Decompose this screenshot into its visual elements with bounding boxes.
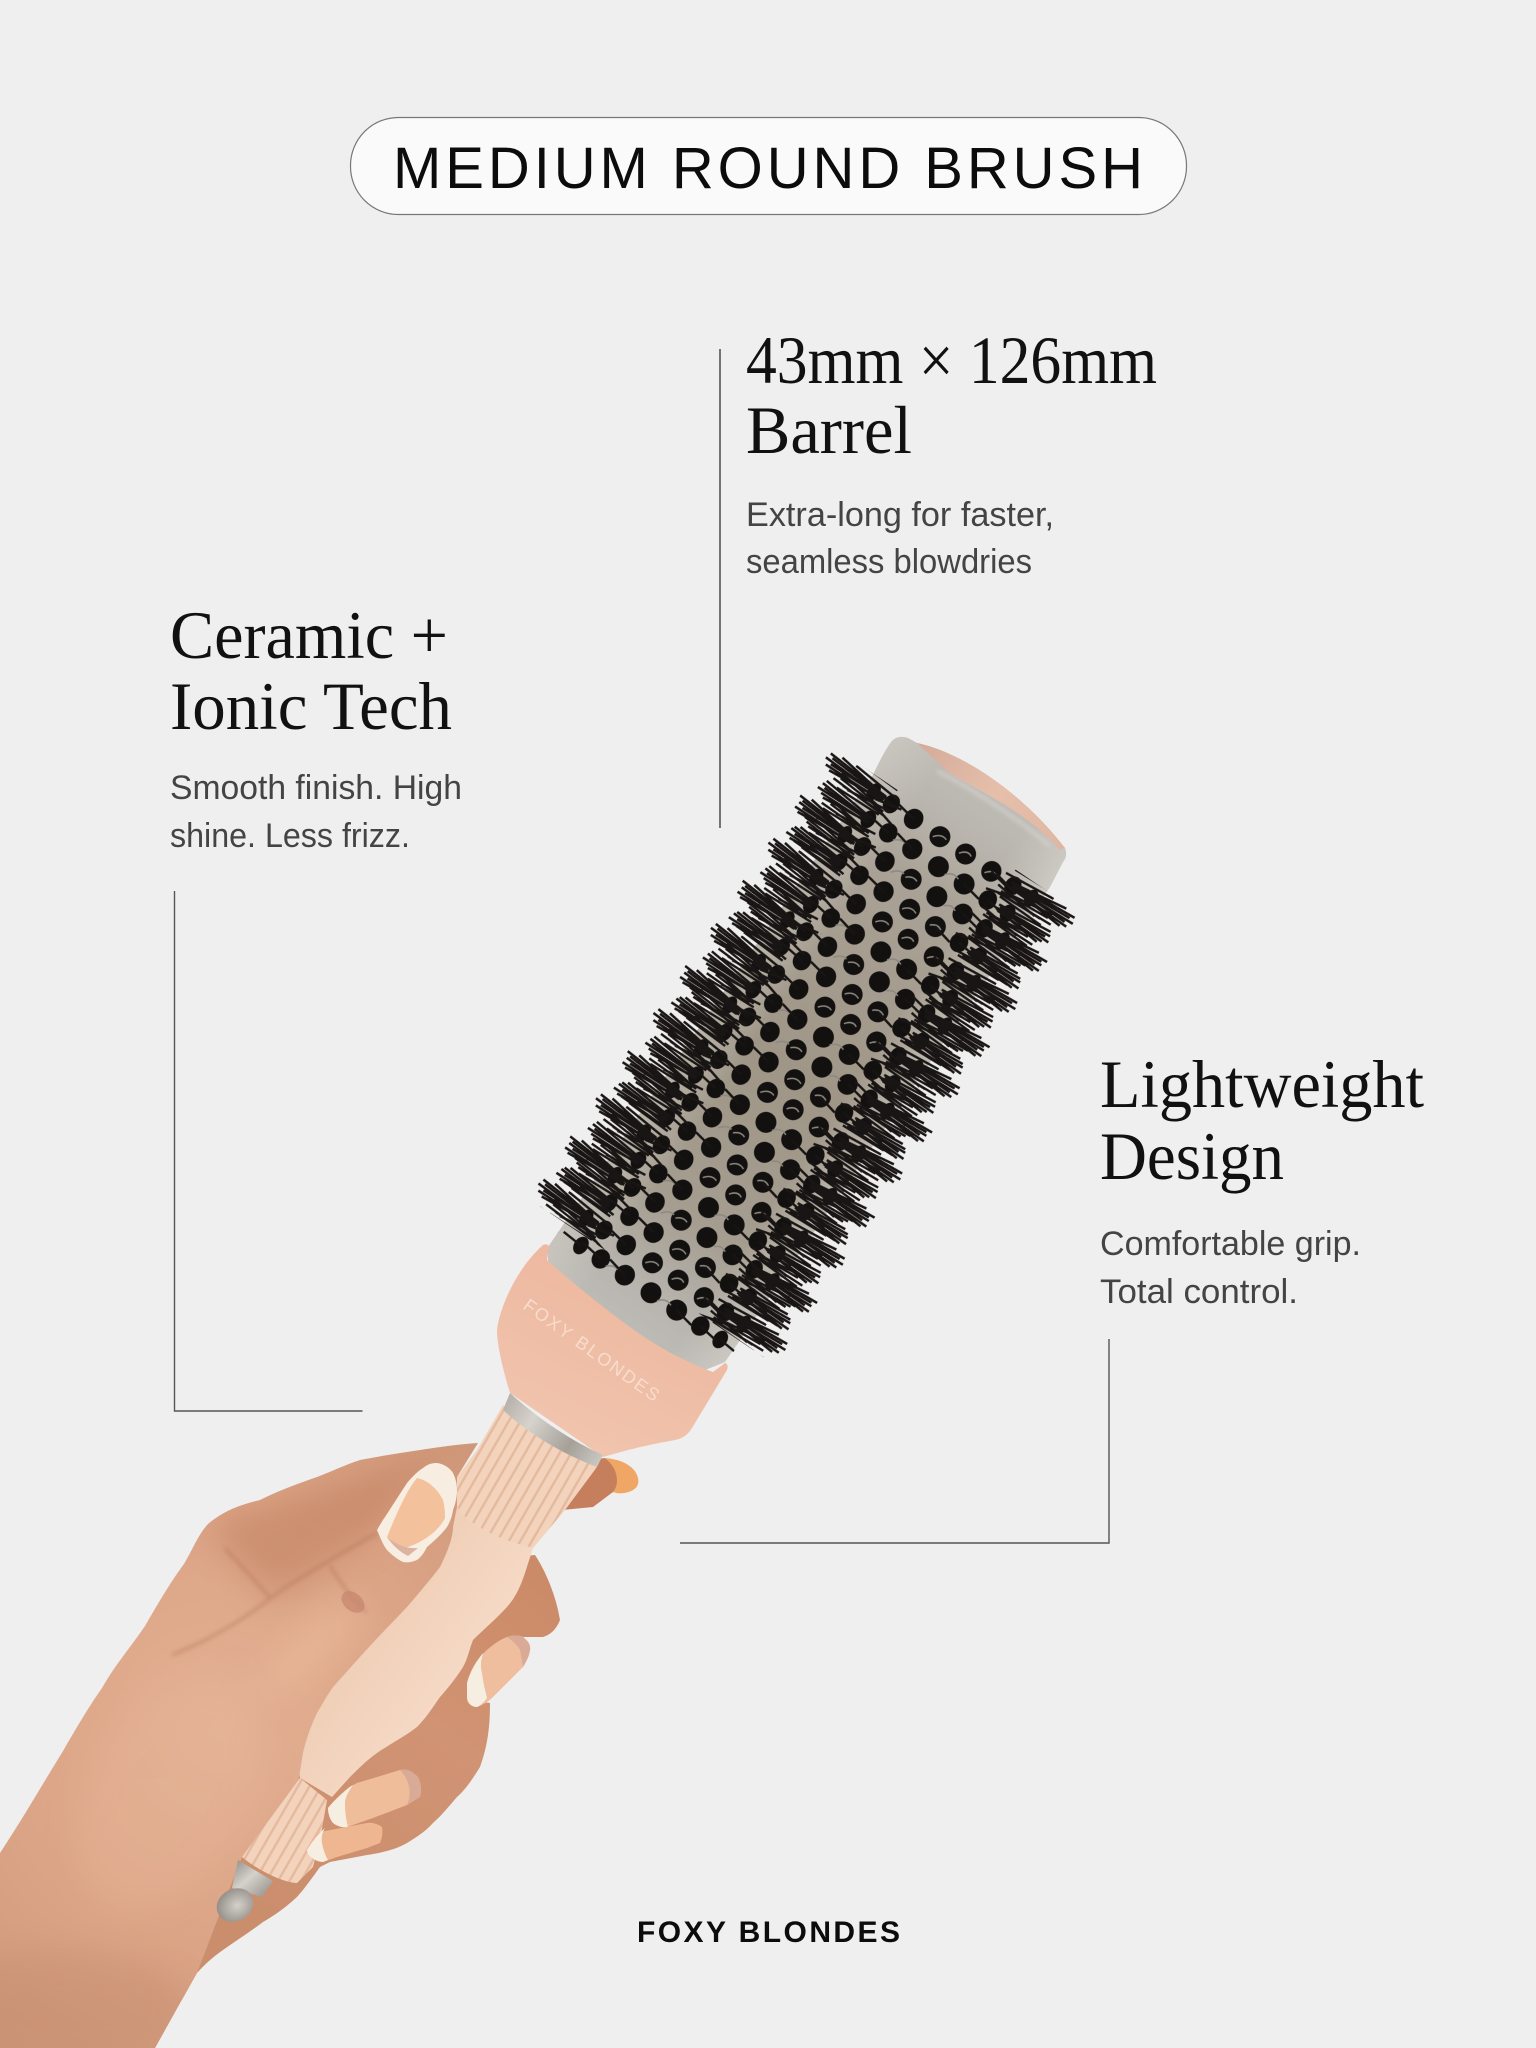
title text: MEDIUM ROUND BRUSH [393, 136, 1143, 201]
body: lightweight: Comfortable grip. [1100, 1225, 1361, 1263]
hand shading [0, 1440, 478, 2048]
heading: lightweight: Design [1100, 1118, 1284, 1194]
callout: barrel size [746, 322, 1157, 581]
heading: lightweight [1100, 1046, 1424, 1194]
leader line: ceramic [174, 891, 362, 1411]
leader line: lightweight [680, 1339, 1109, 1543]
knuckle mark [337, 1587, 369, 1617]
bristles: right side [697, 860, 1080, 1365]
brush handle: lower ribs [242, 1778, 327, 1883]
leader line: barrel [719, 349, 721, 828]
barrel end cap [917, 743, 1065, 850]
knuckle creases [172, 1533, 377, 1655]
callout: lightweight [1100, 1046, 1424, 1311]
brush head [516, 737, 1080, 1383]
callout: ceramic ionic [170, 597, 462, 855]
heading: ceramic ionic [170, 597, 452, 744]
body: barrel size [746, 496, 1054, 581]
body: barrel size: seamless blowdries [746, 543, 1032, 581]
body: lightweight [1100, 1225, 1361, 1311]
heading: lightweight: Lightweight [1100, 1046, 1424, 1122]
heading: ceramic ionic: Ceramic + [170, 597, 448, 673]
silver ring [503, 1393, 603, 1467]
footer brand: FOXY BLONDES [637, 1916, 900, 1949]
heading: ceramic ionic: Ionic Tech [170, 668, 452, 744]
photo: hand holding round brush [0, 737, 1080, 2048]
hand: palm and thumb [0, 1440, 478, 2048]
body: barrel size: Extra-long for faster, [746, 496, 1054, 534]
heading: barrel size: 43mm × 126mm [746, 322, 1157, 398]
brush collar [497, 1244, 728, 1457]
nail: thumb [377, 1463, 457, 1562]
barrel [548, 737, 1066, 1380]
nail: ring finger [328, 1769, 421, 1827]
nail: middle finger [467, 1636, 530, 1707]
collar brand text: FOXY BLONDES [520, 1295, 663, 1405]
cap sheen [937, 771, 1050, 846]
heading: barrel size [746, 322, 1157, 468]
body: ceramic ionic [170, 769, 462, 855]
body: ceramic ionic: shine. Less frizz. [170, 817, 410, 855]
body: lightweight: Total control. [1100, 1273, 1298, 1311]
brush handle: upper ribs [457, 1405, 597, 1548]
body: ceramic ionic: Smooth finish. High [170, 769, 462, 807]
bristles: left side [528, 747, 912, 1251]
vent holes and bristles [516, 747, 1080, 1383]
barrel vent holes [553, 773, 1044, 1360]
nail: little finger [307, 1823, 382, 1862]
brush metal end [211, 1860, 273, 1928]
hand: back fingers [100, 1458, 638, 2048]
brush handle: grip [290, 1507, 533, 1797]
title pill [350, 118, 1186, 214]
heading: barrel size: Barrel [746, 392, 912, 468]
